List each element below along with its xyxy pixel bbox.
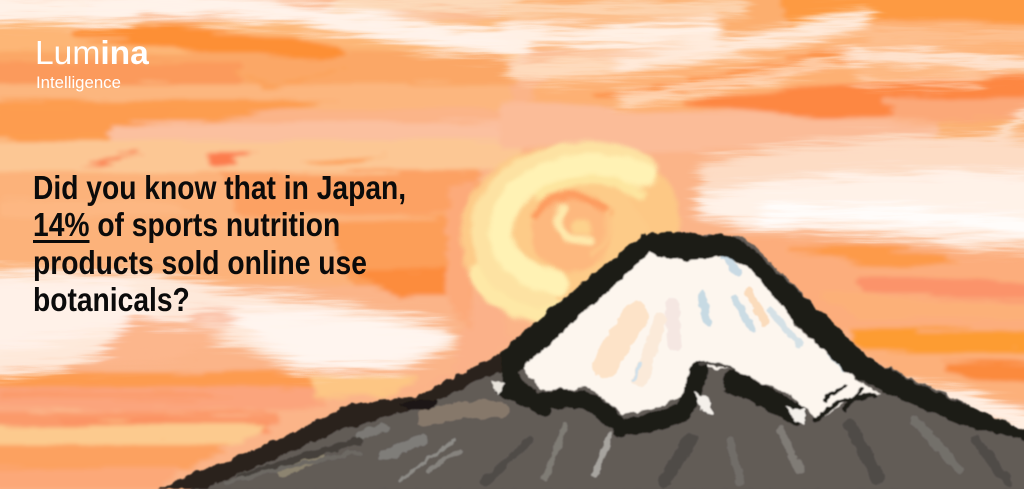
heading: botanicals statistic: products sold online use [33, 244, 367, 281]
heading: botanicals statistic: botanicals? [33, 281, 190, 318]
snow patches [695, 392, 712, 414]
heading: botanicals statistic: Did you know that in Japan, [33, 169, 406, 206]
lower left [0, 372, 320, 392]
heading: botanicals statistic: 14% of sports nutrition [33, 206, 340, 243]
snow line black edge [500, 363, 875, 428]
logo: Lumina Intelligence [35, 35, 149, 92]
white clouds upper [0, 3, 1024, 148]
logo: Lumina Intelligence: Intelligence [36, 73, 121, 92]
rock shading strokes [225, 409, 1008, 484]
icon: Mount Fuji [157, 231, 1024, 489]
black ridge outline [500, 233, 652, 385]
middle left [0, 172, 470, 285]
heading: botanicals statistic [33, 169, 406, 318]
mid and lower right [690, 240, 1024, 330]
snow colour patches [605, 258, 845, 380]
icon: swirling sun [460, 144, 680, 328]
snow cap [523, 248, 882, 420]
mountain rock body [157, 235, 1024, 489]
top right [500, 0, 1024, 50]
dark lower-left ridge [157, 347, 530, 489]
logo: Lumina Intelligence: Lumina [35, 35, 149, 72]
top left bands [0, 20, 520, 62]
white clouds right [695, 135, 1024, 445]
rock base under brush edge [190, 400, 1024, 489]
white cloud left [0, 270, 455, 380]
